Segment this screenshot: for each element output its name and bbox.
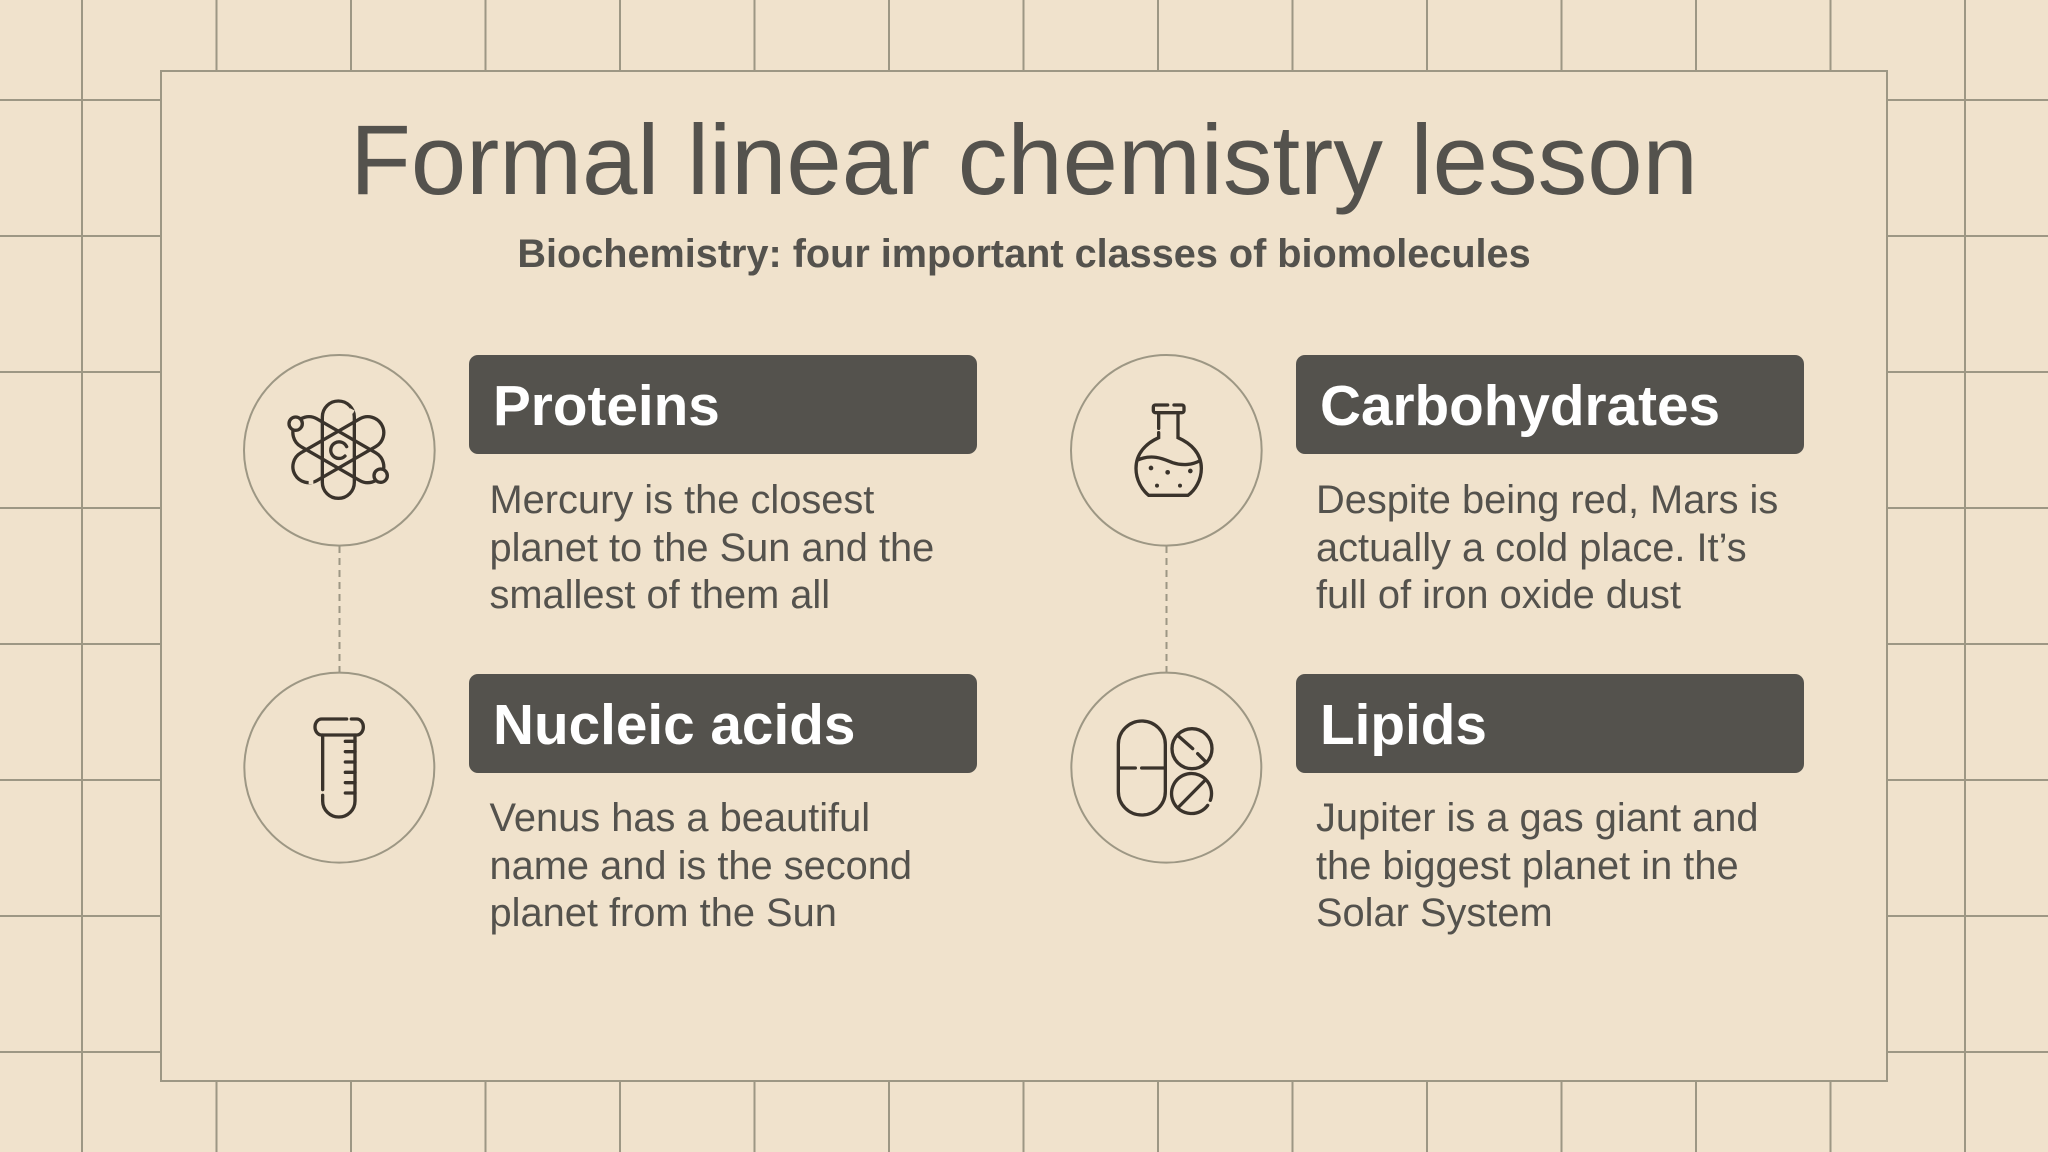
heading: Nucleic acids: Nucleic acids [493, 694, 855, 757]
text: Nucleic acids description [490, 796, 912, 935]
icon: test tube in circle [243, 672, 436, 864]
text: Lipids description: Jupiter is a gas giant and [1316, 796, 1758, 840]
heading: Carbohydrates [1296, 355, 1804, 454]
title: Formal linear chemistry lesson [350, 105, 1698, 216]
text: Lipids description: Solar System [1316, 891, 1553, 935]
heading: Nucleic acids [469, 674, 977, 773]
heading: Lipids: Lipids [1320, 694, 1487, 757]
heading: Proteins: Proteins [493, 375, 720, 438]
text: Proteins description: Mercury is the closest [490, 478, 874, 522]
connector: right dashed line [1166, 546, 1168, 672]
text: Carbohydrates description [1316, 478, 1778, 617]
heading: Carbohydrates: Carbohydrates [1320, 375, 1720, 438]
text: Nucleic acids description: planet from the Sun [490, 891, 837, 935]
subtitle: Biochemistry: four important classes of biomolecules [517, 232, 1531, 276]
icon: atom in circle [243, 354, 436, 547]
connector: left dashed line [338, 546, 340, 672]
text: Proteins description: planet to the Sun and the [490, 526, 934, 570]
text: Lipids description [1316, 796, 1758, 935]
text: Proteins description: smallest of them all [490, 573, 830, 617]
panel: main card [160, 70, 1888, 1082]
text: Proteins description [490, 478, 934, 617]
text: Nucleic acids description: Venus has a beautiful [490, 796, 870, 840]
icon: pills in circle [1070, 672, 1262, 864]
icon: flask in circle [1070, 354, 1263, 547]
text: Carbohydrates description: full of iron oxide dust [1316, 573, 1681, 617]
heading: Lipids [1296, 674, 1804, 773]
heading: Proteins [469, 355, 977, 454]
text: Nucleic acids description: name and is the second [490, 844, 912, 888]
text: Lipids description: the biggest planet in the [1316, 844, 1739, 888]
text: Carbohydrates description: Despite being red, Mars is [1316, 478, 1778, 522]
text: Carbohydrates description: actually a cold place. It’s [1316, 526, 1747, 570]
